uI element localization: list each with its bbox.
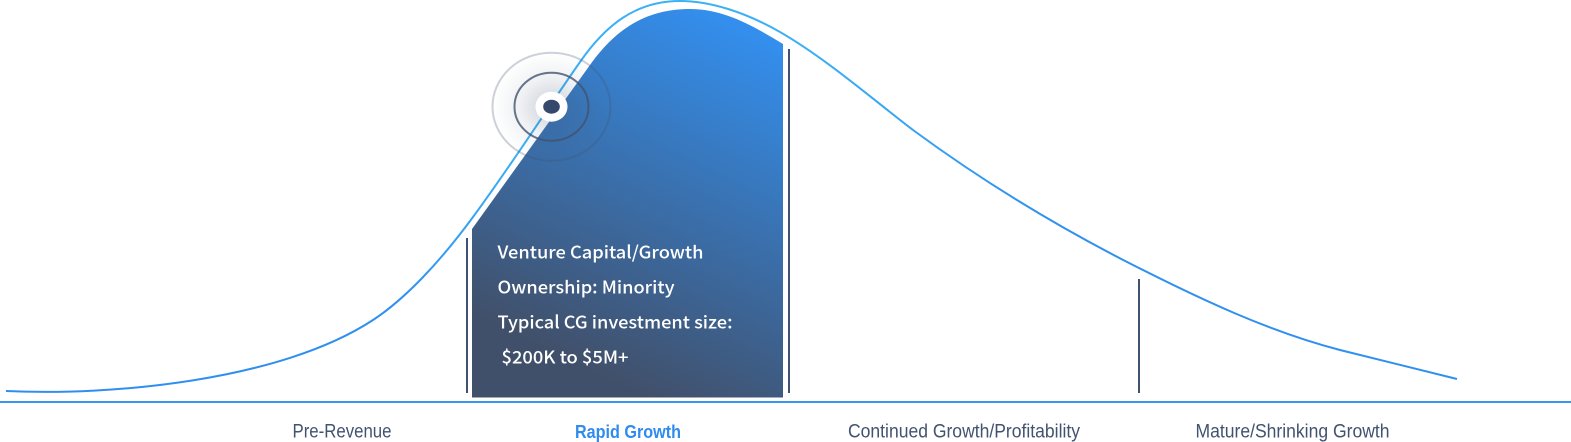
text block: rapid growth details	[496, 240, 732, 370]
icon: current position marker	[492, 53, 610, 161]
axis line	[0, 401, 1571, 403]
divider: stage boundary 2	[788, 49, 790, 393]
divider: stage boundary 3	[1138, 279, 1140, 393]
label: mature/shrinking growth: Mature/Shrinking Growth	[1196, 422, 1390, 442]
label: pre-revenue: Pre-Revenue	[292, 422, 392, 442]
text block: rapid growth details: $200K to $5M+	[502, 345, 629, 370]
text block: rapid growth details: Venture Capital/Growth	[496, 240, 704, 265]
label: continued growth/profitability: Continued Growth/Profitability	[848, 422, 1080, 442]
text block: rapid growth details: Typical CG investment size:	[498, 310, 732, 335]
divider: stage boundary 1	[466, 238, 468, 393]
text block: rapid growth details: Ownership: Minority	[498, 275, 675, 300]
panel: rapid growth highlighted area	[472, 9, 783, 398]
label: rapid growth: Rapid Growth	[575, 422, 681, 442]
